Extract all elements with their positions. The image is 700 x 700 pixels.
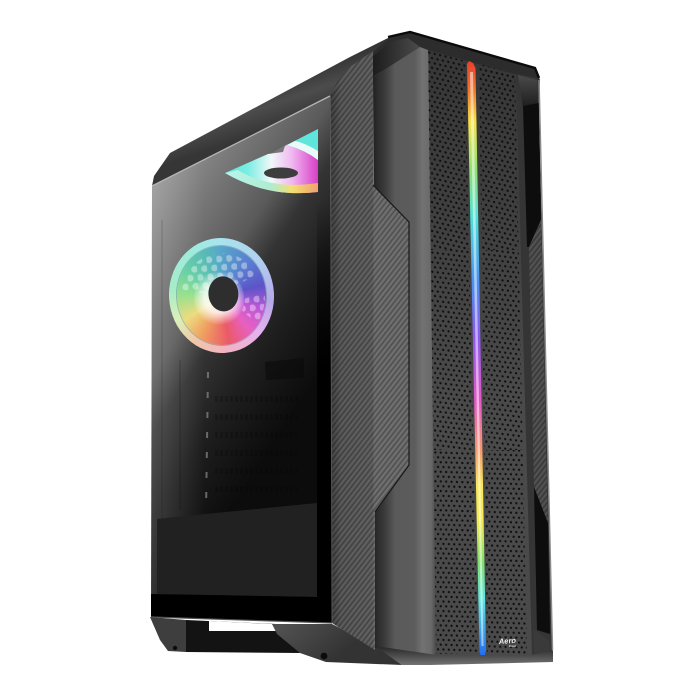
- fan blades: [174, 243, 269, 348]
- base plinth: [375, 646, 553, 665]
- upper gray lip: [518, 75, 539, 108]
- top front rim: [373, 32, 540, 112]
- front foot: [272, 624, 402, 665]
- upper black fade at glass right edge: [317, 190, 331, 370]
- rear feet and base recess: [150, 617, 300, 653]
- fan outer ring: [165, 234, 278, 357]
- aerocool logo: Aero: [498, 636, 517, 646]
- right light edge: [539, 80, 552, 650]
- lower black vent: [534, 487, 550, 634]
- lower corner: [533, 629, 551, 656]
- top panel: [152, 32, 425, 186]
- bright glass top edge: [152, 96, 330, 186]
- middle gray side section: [529, 220, 548, 523]
- perforation holes: [428, 52, 527, 654]
- fan hex grille and hub: [182, 253, 265, 324]
- front perforated mesh background: [428, 50, 533, 656]
- right side vents: [516, 74, 553, 660]
- upper black vent: [523, 103, 541, 247]
- glass side panel: [151, 96, 332, 623]
- carbon fibre side panel: [330, 51, 409, 650]
- black glass frame: [151, 370, 332, 623]
- big rainbow fan: [169, 238, 274, 353]
- rgb light strip: [467, 61, 486, 657]
- aerocool logo: Cool: [509, 644, 516, 648]
- pc case illustration: [150, 30, 554, 665]
- dark lower shroud: [157, 503, 317, 597]
- interior faint details: [162, 220, 284, 518]
- top rainbow fan: [225, 129, 318, 193]
- middle gray front panel: [373, 47, 437, 657]
